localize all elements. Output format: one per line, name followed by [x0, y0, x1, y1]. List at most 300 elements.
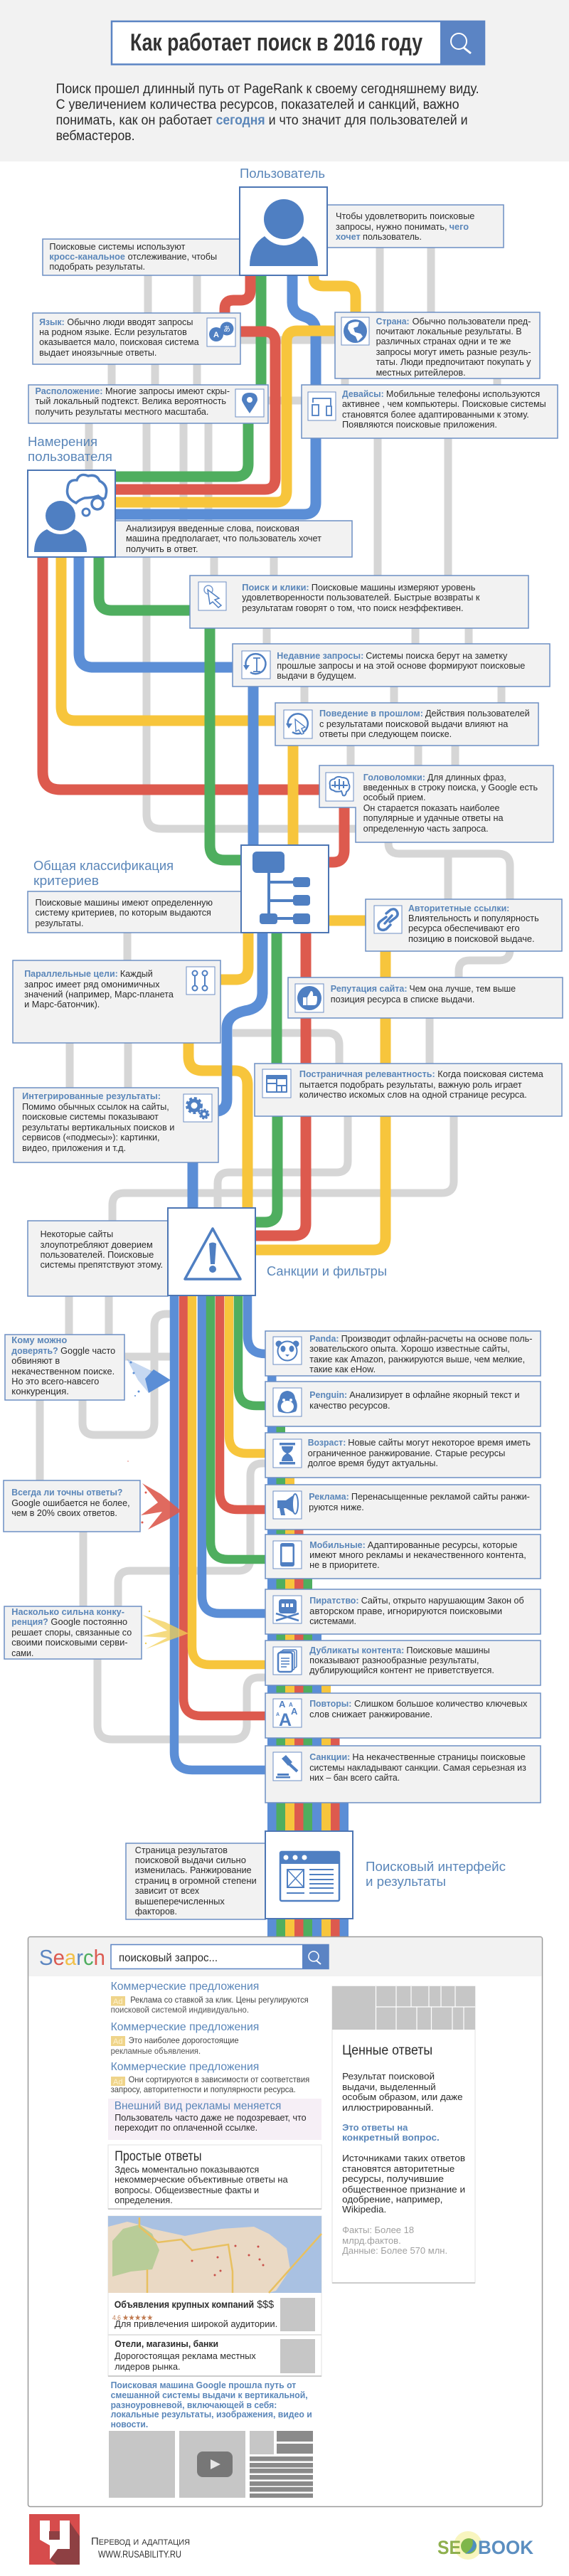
- intro text: С увеличением количества ресурсов, показателей и санкций, важно: [56, 97, 459, 112]
- splat: red: [127, 1461, 181, 1530]
- ad block 2: Это наиболее дорогостоящие: [129, 2035, 239, 2045]
- panel: Недавние запросы: [233, 644, 550, 687]
- icon: play button: [197, 2452, 233, 2477]
- panel: Головоломки: Для длинных фраз,: [427, 773, 506, 783]
- listing 1: Для привлечения широкой аудитории.: [115, 2319, 277, 2329]
- card: valuable answers: ресурсы, получившие: [342, 2174, 444, 2184]
- card: valuable answers: Факты: Более 18: [342, 2225, 414, 2235]
- panel: Параллельные цели: значений (например, Марс-планета: [24, 990, 174, 1000]
- card: valuable answers: млрд.фактов.: [342, 2236, 401, 2246]
- logo: SEO Book: SE: [437, 2537, 461, 2558]
- icon: globe: [341, 317, 369, 345]
- box: user intent: [28, 470, 115, 557]
- panel: Возраст: [265, 1433, 541, 1478]
- listing 2: лидеров рынка.: [115, 2362, 181, 2372]
- panel: Дубликаты контента: Дубликаты контента:: [309, 1645, 404, 1655]
- card: valuable answers: конкретный вопрос.: [342, 2133, 440, 2143]
- card: valuable answers: Результат поисковой: [342, 2072, 435, 2082]
- panel: cross-channel: подобрать результаты.: [49, 262, 145, 272]
- callout: ad look: Внешний вид рекламы меняется: [115, 2100, 281, 2112]
- panel: Страна: Обычно пользователи пред-: [413, 317, 531, 327]
- panel: Насколько сильна конкуренция: Google постоянно: [50, 1617, 127, 1627]
- credit text: [91, 2535, 190, 2560]
- heading: Санкции и фильтры: Санкции и фильтры: [267, 1264, 387, 1278]
- panel: Penguin: Анализирует в офлайне якорный текст и: [349, 1390, 520, 1400]
- search logo: Search: [39, 1945, 105, 1970]
- panel: Насколько сильна конкуренция: [4, 1606, 142, 1659]
- panel: Язык: Язык:: [39, 317, 65, 327]
- logo: Rusability: [29, 2514, 80, 2565]
- media blocks: [109, 2431, 313, 2498]
- search input: [111, 1944, 329, 1969]
- panel: Насколько сильна конкуренция: ренция?: [11, 1617, 48, 1627]
- card: valuable answers: становятся авторитетные: [342, 2164, 454, 2174]
- panel: Panda: такие как eHow.: [309, 1364, 376, 1374]
- panel: Страна: местных ритейлеров.: [376, 368, 466, 378]
- splat: yellow: [142, 1611, 188, 1649]
- panel: Санкции: Санкции:: [309, 1752, 350, 1762]
- icon: phone: [273, 1541, 302, 1569]
- panel: abuse note: злоупотребляют доверием: [41, 1240, 153, 1250]
- heading: Намерения пользователя: Намерения: [28, 435, 97, 449]
- panel: Девайсы: Девайсы:: [342, 389, 384, 399]
- panel: criteria system: [28, 891, 241, 933]
- icon: documents: [273, 1647, 302, 1675]
- ad block 3: Они сортируются в зависимости от соответствия: [129, 2074, 309, 2084]
- panel: Всегда ли точны ответы: [4, 1480, 140, 1532]
- title search box: Как работает поиск в 2016 году: [130, 29, 422, 56]
- panel: Возраст: ограниченное ранжирование. Старые ресурсы: [308, 1448, 505, 1458]
- intro text: понимать, как он работает: [56, 113, 213, 128]
- panel: analysis: Анализируя введенные слова, поисковая: [126, 524, 299, 534]
- panel: Поведение в прошлом: Поведение в прошлом:: [319, 709, 423, 719]
- title search box: [112, 21, 484, 65]
- panel: results note: зависит от всех: [135, 1886, 200, 1896]
- panel: user need: пользователь.: [363, 232, 422, 242]
- panel: Расположение: [28, 385, 268, 423]
- heading: Общая классификация критериев: [33, 859, 174, 888]
- listing 2: [115, 2339, 315, 2373]
- card: simple answers: некоммерческие объективные ответы на: [115, 2175, 288, 2185]
- panel: Поведение в прошлом: Действия пользователей: [425, 709, 530, 719]
- panel: cross-channel: отслеживание, чтобы: [128, 252, 217, 262]
- panel: Поиск и клики: Поиск и клики:: [242, 583, 309, 593]
- panel: Пиратство: авторском праве, игнорируются поисковыми: [309, 1606, 502, 1616]
- panel: Поиск и клики: [190, 576, 528, 628]
- search input: поисковый запрос...: [119, 1952, 218, 1964]
- panel: Расположение: Расположение:: [36, 386, 102, 396]
- icon: click: [198, 582, 226, 610]
- panel: Реклама: руются ниже.: [309, 1502, 364, 1512]
- panel: Язык: на родном языке. Если результатов: [39, 327, 187, 337]
- ad block 3: Коммерческие предложения: [111, 2061, 259, 2073]
- panel: Пиратство: Сайты, открыто нарушающим Закон об: [361, 1596, 524, 1606]
- panel: Язык: Обычно люди вводят запросы: [67, 317, 193, 327]
- panel: Страна: Страна:: [376, 317, 410, 327]
- panel: Penguin: качество ресурсов.: [309, 1401, 390, 1411]
- card: valuable answers: Ценные ответы: [342, 2043, 432, 2058]
- panel: Головоломки: популярные и удачные ответы на: [363, 813, 504, 823]
- panel: Недавние запросы: прошлые запросы и на этой основе формируют поисковые: [277, 661, 525, 671]
- panel: Репутация сайта: позиция ресурса в списке выдачи.: [331, 995, 474, 1005]
- panel: Интегрированные результаты: поисковые системы показывают: [22, 1112, 159, 1122]
- panel: Дубликаты контента: Поисковые машины: [406, 1645, 490, 1655]
- panel: Головоломки: Головоломки:: [363, 773, 425, 783]
- intro text: и что значит для пользователей и: [269, 113, 468, 128]
- panel: Всегда ли точны ответы: Google ошибается не более,: [11, 1498, 130, 1508]
- card: local results: [108, 2216, 321, 2377]
- panel: results note: вышеперечисленных: [135, 1897, 225, 1907]
- panel: Девайсы: [302, 385, 558, 438]
- panel: Кому можно доверять: обвиняют в: [11, 1356, 60, 1366]
- panel: Постраничная релевантность: количество искомых слов на одной странице ресурса.: [299, 1090, 527, 1100]
- heading: Намерения пользователя: [28, 435, 112, 464]
- card: valuable answers: [332, 1986, 475, 2284]
- icon: language: [207, 318, 235, 346]
- panel: results note: факторов.: [135, 1907, 177, 1917]
- icon: user: [250, 199, 318, 266]
- panel: abuse note: [28, 1221, 168, 1296]
- panel: Недавние запросы: Недавние запросы:: [277, 651, 363, 661]
- panel: Возраст: Возраст:: [308, 1438, 346, 1448]
- ad block 1: Ad: [113, 1998, 122, 2006]
- box: criteria: [241, 845, 329, 933]
- panel: results note: поисковой выдачи сильно: [135, 1855, 246, 1865]
- panel: Девайсы: становятся более адаптированными к этому.: [342, 410, 529, 420]
- box: user: [240, 187, 327, 275]
- panel: Penguin: Penguin:: [309, 1390, 347, 1400]
- panel: Параллельные цели: запрос имеет ряд омонимичных: [24, 980, 160, 990]
- panel: Язык: [33, 313, 240, 364]
- panel: abuse note: системы препятствуют этому.: [41, 1260, 163, 1270]
- heading: Намерения пользователя: пользователя: [28, 450, 112, 464]
- text: Google evolution: смешанной системы выдачи к вертикальной,: [111, 2390, 308, 2400]
- panel: Девайсы: Мобильные телефоны используются: [386, 389, 540, 399]
- panel: Девайсы: активнее , чем компьютеры. Поисковые системы: [342, 399, 546, 409]
- panel: Язык: оказывается мало, поисковая система: [39, 337, 199, 347]
- icon: megaphone: [273, 1491, 302, 1519]
- panel: results note: Страница результатов: [135, 1845, 228, 1855]
- icon: gears: [184, 1094, 212, 1122]
- panel: Реклама: [265, 1485, 541, 1530]
- text: Google evolution: локальные результаты, изображения, видео и: [111, 2410, 312, 2419]
- panel: Страна: различных странах одни и те же: [376, 336, 511, 346]
- panel: Повторы: Слишком большое количество ключевых: [354, 1699, 528, 1709]
- listing 2: Дорогостоящая реклама местных: [115, 2351, 256, 2361]
- ad block 1: Коммерческие предложения: [111, 1981, 259, 1993]
- panel: user need: запросы, нужно понимать,: [336, 222, 447, 232]
- panel: Санкции: них – бан всего сайта.: [309, 1773, 400, 1783]
- panel: Страна: почитают локальные результаты. В: [376, 327, 522, 336]
- panel: Повторы: [265, 1693, 541, 1738]
- colored pipes: upper section: [43, 275, 385, 1250]
- colored pipes: sanctions section: [174, 1295, 265, 1770]
- card: simple answers: вопросы. Общеизвестные факты и: [115, 2185, 259, 2195]
- icon: page layout: [262, 1069, 291, 1098]
- icon: parallel paths: [186, 967, 215, 995]
- ad block 2: Ad: [113, 2037, 122, 2046]
- panel: Параллельные цели: и Марс-батончик).: [24, 1000, 100, 1009]
- icon: repeated letters: A: [279, 1710, 292, 1730]
- panel: Репутация сайта: Репутация сайта:: [331, 984, 407, 994]
- panel: Головоломки: [319, 765, 553, 842]
- panel: Повторы: слов снижает ранжирование.: [309, 1710, 432, 1719]
- panel: Авторитетные ссылки: позицию в поисковой выдаче.: [408, 934, 535, 944]
- panel: Девайсы: Появляются поисковые приложения.: [342, 420, 497, 430]
- panel: Кому можно доверять: доверять?: [11, 1346, 58, 1356]
- panel: analysis: машина предполагает, что пользователь хочет: [126, 534, 321, 544]
- panel: Расположение: тый локальный подтекст. Велика вероятность: [36, 396, 226, 406]
- panel: Недавние запросы: выдачи в будущем.: [277, 671, 356, 681]
- credit text: WWW.RUSABILITY.RU: [98, 2548, 181, 2560]
- panel: analysis: получить в ответ.: [126, 544, 198, 554]
- panel: Поведение в прошлом: ответы при следующем поиске.: [319, 729, 452, 739]
- intro text: вебмастеров.: [56, 129, 135, 144]
- panel: Всегда ли точны ответы: чем в 20% своих ответов.: [11, 1508, 117, 1518]
- panel: Санкции: системы накладывают санкции. Самая серьезная из: [309, 1763, 526, 1773]
- panel: Поведение в прошлом: с результатами поисковой выдачи влияют на: [319, 719, 508, 729]
- card: valuable answers: Это ответы на: [342, 2123, 408, 2133]
- ad block 3: запросу, авторитетности и популярности ресурса.: [111, 2084, 296, 2094]
- panel: Язык: выдает иноязычные ответы.: [39, 348, 156, 358]
- ad block 3: Ad: [113, 2078, 122, 2087]
- ad block 1: Реклама со ставкой за клик. Цены регулируются: [130, 1995, 309, 2005]
- panel: Санкции: [265, 1746, 541, 1803]
- panel: Кому можно доверять: Кому можно: [11, 1335, 68, 1345]
- panel: Параллельные цели: [13, 960, 220, 1043]
- panel: Пиратство: [265, 1589, 541, 1634]
- icon: thinking user: [34, 475, 107, 552]
- panel: Насколько сильна конкуренция: решает споры, связанные со: [11, 1628, 132, 1638]
- panel: Поиск и клики: результатам говорят о том, что поиск неэффективен.: [242, 603, 464, 613]
- callout: ad look: переходит по оплаченной ссылке.: [115, 2123, 257, 2133]
- panel: Интегрированные результаты: результаты вертикальных поисков и: [22, 1123, 174, 1133]
- panel: results note: [126, 1843, 265, 1919]
- panel: Репутация сайта: Чем она лучше, тем выше: [410, 984, 516, 994]
- panel: Головоломки: особый прием.: [363, 793, 425, 802]
- heading: Пользователь: Пользователь: [240, 166, 325, 181]
- panel: Насколько сильна конкуренция: своими поисковыми серви-: [11, 1638, 128, 1648]
- icon: penguin: [273, 1388, 302, 1416]
- icon: repeated letters: A: [289, 1702, 293, 1708]
- panel: Panda: зовательского опыта. Хорошо известные сайты,: [309, 1344, 510, 1354]
- gray background pipes: [40, 248, 510, 1739]
- image grid: [332, 1986, 475, 2030]
- panel: user need: чего: [450, 222, 469, 232]
- panel: Расположение: Многие запросы имеют скры-: [105, 386, 230, 396]
- icon: recent query: [242, 651, 270, 679]
- panel: Постраничная релевантность: пытается подобрать результаты, важную роль играет: [299, 1080, 522, 1090]
- panel: Параллельные цели: Параллельные цели:: [24, 969, 118, 979]
- heading: Поисковый интерфейс и результаты: [366, 1860, 506, 1889]
- panel: Головоломки: введенных в строку поиска, у Google есть: [363, 783, 538, 793]
- panel: Постраничная релевантность: [255, 1064, 562, 1116]
- panel: Реклама: Реклама:: [309, 1492, 349, 1502]
- panel: Поведение в прошлом: [275, 703, 538, 746]
- ad block 2: [111, 2021, 259, 2056]
- pipe stripes between sanction panels: [267, 1376, 349, 1937]
- panel: Возраст: долгое время будут актуальны.: [308, 1458, 438, 1468]
- header band: [0, 0, 569, 161]
- panel: Дубликаты контента: дублирующийся контент не приветствуется.: [309, 1665, 494, 1675]
- panel: Кому можно доверять: [5, 1335, 124, 1400]
- panel: Кому можно доверять: Но это всего-навсего: [11, 1377, 99, 1387]
- heading: Поисковый интерфейс и результаты: и результаты: [366, 1875, 446, 1889]
- panel: Интегрированные результаты: Помимо обычных ссылок на сайты,: [22, 1102, 169, 1112]
- card: valuable answers: выдачи, выделенный: [342, 2082, 436, 2092]
- card: simple answers: определения.: [115, 2195, 173, 2205]
- map: [108, 2216, 321, 2293]
- card: valuable answers: Wikipedia.: [342, 2205, 386, 2215]
- panel: Поиск и клики: Поисковые машины измеряют уровень: [312, 583, 476, 593]
- panel: Реклама: Перенасыщенные рекламой сайты ранжи-: [351, 1492, 530, 1502]
- ad block 2: Коммерческие предложения: [111, 2021, 259, 2033]
- panel: criteria system: систему критериев, по которым выдаются: [36, 908, 211, 918]
- icon: pirate: [273, 1596, 302, 1623]
- panel: Всегда ли точны ответы: Всегда ли точны ответы?: [11, 1488, 122, 1498]
- panel: search results mock: [28, 1936, 542, 2507]
- intro text: [56, 82, 479, 144]
- listing 1: $$$: [257, 2299, 275, 2311]
- panel: Мобильные: имеют много рекламы и некачественного контента,: [309, 1550, 526, 1560]
- icon: tree: [252, 852, 310, 924]
- listing 1: 4.6 ★★★★★: [112, 2314, 153, 2321]
- icon: language: A: [213, 331, 219, 339]
- icon: devices: [308, 392, 336, 420]
- panel: cross-channel: [43, 239, 240, 275]
- panel: Кому можно доверять: некачественном поиске.: [11, 1367, 115, 1377]
- panel: Penguin: [265, 1382, 541, 1426]
- panel: Насколько сильна конкуренция: сами.: [11, 1648, 33, 1658]
- listing 2: Отели, магазины, банки: [115, 2339, 218, 2349]
- icon: links: [374, 906, 402, 933]
- panel: Авторитетные ссылки: ресурса обеспечивают его: [408, 923, 520, 933]
- panel: Параллельные цели: Каждый: [120, 969, 153, 979]
- icon: warning triangle: [185, 1229, 240, 1279]
- panel: cross-channel: Поисковые системы используют: [49, 242, 186, 252]
- panel: Мобильные: [265, 1535, 541, 1579]
- icon: repeated letters: A: [279, 1699, 286, 1710]
- panel: Авторитетные ссылки: Влиятельность и популярность: [408, 913, 539, 923]
- panel: Санкции: На некачественные страницы поисковые: [352, 1752, 526, 1762]
- panel: Мобильные: не в приоритете.: [309, 1560, 380, 1570]
- intro text: сегодня: [216, 113, 265, 128]
- listing 1: Объявления крупных компаний: [115, 2299, 254, 2310]
- heading: Общая классификация критериев: Общая классификация: [33, 859, 174, 873]
- logo: SEO Book: [437, 2531, 533, 2560]
- panel: Постраничная релевантность: Постраничная релевантность:: [299, 1069, 435, 1079]
- panel: Пиратство: системами.: [309, 1616, 356, 1626]
- callout: ad look: Пользователь часто даже не подозревает, что: [115, 2113, 307, 2123]
- text: Google evolution: разноуровневой, включающей в себя:: [111, 2400, 277, 2410]
- panel: Постраничная релевантность: Когда поисковая система: [437, 1069, 543, 1079]
- panel: Поиск и клики: удовлетворенности пользователей. Быстрые возвраты к: [242, 593, 480, 603]
- panel: Авторитетные ссылки: [366, 899, 562, 951]
- callout: ad look: [108, 2099, 321, 2140]
- icon: thumb up: [295, 984, 324, 1012]
- icon: language: あ: [223, 325, 230, 334]
- panel: Кому можно доверять: Goggle часто: [60, 1346, 115, 1356]
- panel: user need: Чтобы удовлетворить поисковые: [336, 211, 474, 221]
- panel: abuse note: Некоторые сайты: [41, 1229, 113, 1239]
- icon: gavel: [273, 1752, 302, 1781]
- panel: Мобильные: Мобильные:: [309, 1540, 366, 1550]
- panel: criteria system: Поисковые машины имеют определенную: [36, 898, 213, 908]
- panel: Расположение: получить результаты местного масштаба.: [36, 407, 208, 417]
- icon: hourglass: [273, 1439, 302, 1468]
- panel: user need: [327, 205, 504, 248]
- panel: Panda: такие как Amazon, ранжируются выше, чем мелкие,: [309, 1355, 525, 1364]
- card: valuable answers: Данные: Более 570 млн.: [342, 2246, 447, 2256]
- icon: past behavior: [284, 710, 312, 738]
- panel: Panda: Panda:: [309, 1334, 339, 1344]
- icon: panda: [273, 1337, 302, 1364]
- intro text: Поиск прошел длинный путь от PageRank к своему сегодняшнему виду.: [56, 82, 479, 97]
- icon: repeated letters: [273, 1699, 302, 1730]
- card: simple answers: Простые ответы: [115, 2149, 202, 2164]
- panel: Интегрированные результаты: Интегрированные результаты:: [22, 1091, 161, 1101]
- panel: Panda: Производит офлайн-расчеты на основе поль-: [341, 1334, 532, 1344]
- panel: Недавние запросы: Системы поиска берут на заметку: [366, 651, 508, 661]
- card: valuable answers: особым образом, или даже: [342, 2092, 462, 2102]
- ad block 1: [111, 1981, 309, 2015]
- panel: Головоломки: определенную часть запроса.: [363, 824, 489, 834]
- panel: results note: изменилась. Ранжирование: [135, 1865, 252, 1875]
- heading: Общая классификация критериев: критериев: [33, 874, 99, 888]
- panel: results note: страниц в огромной степени: [135, 1876, 257, 1886]
- icon: browser window: [280, 1851, 340, 1901]
- panel: criteria system: результаты.: [36, 918, 83, 928]
- card: valuable answers: одобрение, например,: [342, 2195, 442, 2205]
- text: Google evolution: [111, 2380, 312, 2429]
- panel: Дубликаты контента: показывают разнообразные результаты,: [309, 1655, 479, 1665]
- panel: Головоломки: Он старается показать наиболее: [363, 803, 499, 813]
- icon: brain: [326, 773, 353, 801]
- panel: Насколько сильна конкуренция: Насколько сильна конку-: [11, 1607, 124, 1617]
- box: interface: [265, 1831, 353, 1919]
- card: simple answers: Здесь моментально показываются: [115, 2165, 259, 2175]
- panel: abuse note: пользователей. Поисковые: [41, 1250, 154, 1260]
- panel: Мобильные: Адаптированные ресурсы, которые: [368, 1540, 518, 1550]
- panel: Panda: [265, 1331, 541, 1376]
- credit text: Перевод и адаптация: [91, 2535, 190, 2548]
- icon: map pin: [235, 389, 264, 417]
- box: warning: [168, 1208, 255, 1295]
- panel: Интегрированные результаты: [14, 1088, 218, 1162]
- card: valuable answers: иллюстрированный.: [342, 2103, 434, 2113]
- ad block 2: рекламные объявления.: [111, 2046, 201, 2056]
- panel: analysis: [115, 521, 352, 557]
- panel: Кому можно доверять: конкуренция.: [11, 1387, 69, 1396]
- logo: SEO Book: BOOK: [478, 2537, 533, 2558]
- ad block 1: поисковой системой индивидуально.: [111, 2005, 249, 2015]
- panel: Возраст: Новые сайты могут некоторое время иметь: [348, 1438, 531, 1448]
- ad block 3: [111, 2061, 309, 2094]
- panel: Дубликаты контента: [265, 1641, 541, 1685]
- panel: Авторитетные ссылки: Авторитетные ссылки:: [408, 903, 509, 913]
- text: Google evolution: Поисковая машина Google прошла путь от: [111, 2380, 296, 2390]
- panel: cross-channel: кросс-канальное: [49, 252, 125, 262]
- icon: repeated letters: A: [291, 1706, 298, 1717]
- panel: Страна: запросы могут иметь разные резуль-: [376, 347, 531, 357]
- splat: blue: [127, 1359, 171, 1396]
- card: valuable answers: общественное признание и: [342, 2185, 465, 2195]
- heading: Поисковый интерфейс и результаты: Поисковый интерфейс: [366, 1860, 506, 1874]
- listing 1: [112, 2298, 315, 2331]
- card: valuable answers: Источниками таких ответов: [342, 2153, 465, 2163]
- panel: Страна: [335, 312, 540, 378]
- panel: Интегрированные результаты: видео, приложения и т.д.: [22, 1143, 126, 1153]
